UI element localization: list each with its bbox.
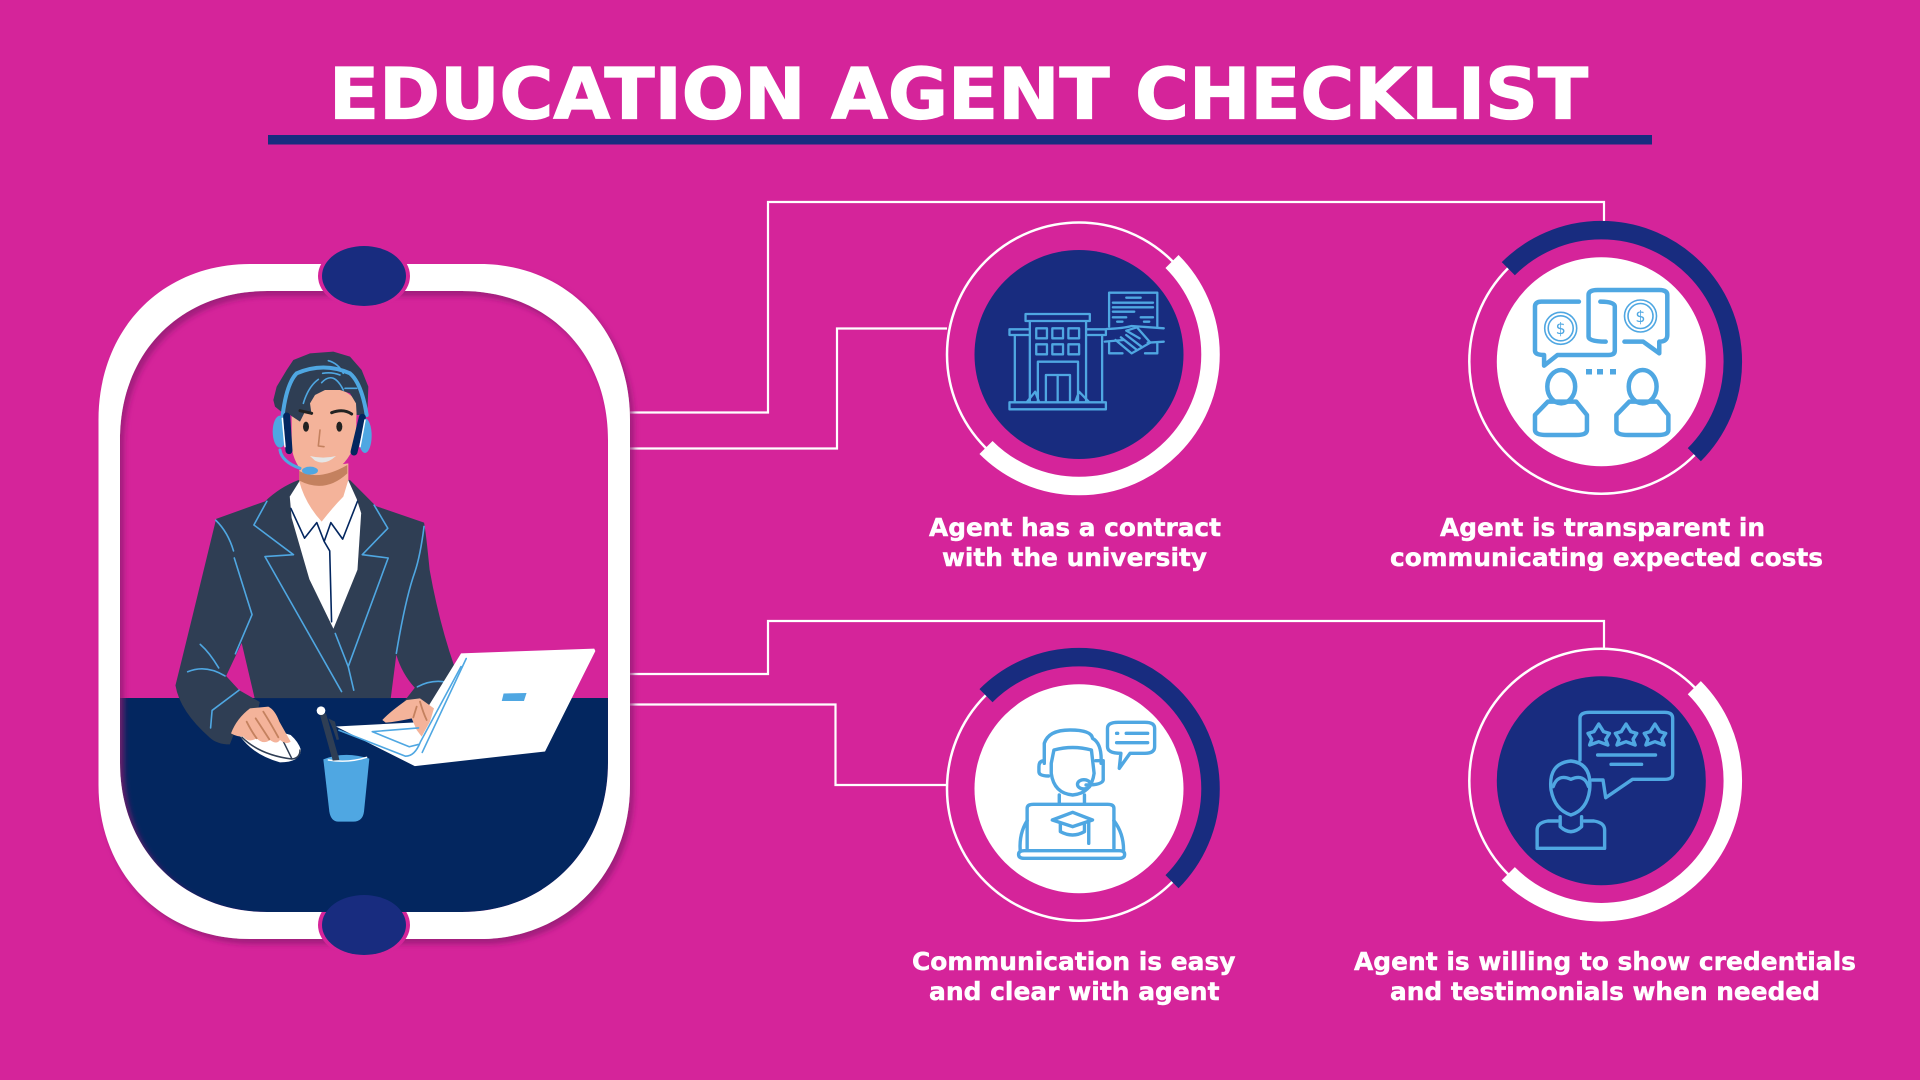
label: and testimonials when needed: [1390, 977, 1820, 1006]
title underline: [268, 135, 1652, 144]
neck: [299, 463, 348, 522]
headset: [273, 367, 372, 475]
jacket seams: [188, 501, 446, 728]
label: Agent is willing to show credentials: [1354, 947, 1856, 976]
right hand: [382, 698, 434, 737]
label: [912, 947, 1236, 1006]
label: communicating expected costs: [1390, 543, 1823, 572]
label: [929, 513, 1221, 572]
icon: money conversation: $: [1556, 319, 1566, 338]
bottom oval: [318, 892, 410, 958]
agent person at laptop: [175, 352, 595, 822]
checklist item 2: transparent costs: [1390, 230, 1823, 572]
title: EDUCATION AGENT CHECKLIST: [329, 54, 1588, 136]
mouse: [240, 732, 301, 762]
icon: money conversation: [1535, 290, 1668, 435]
label: [1390, 513, 1823, 572]
face: [292, 389, 357, 477]
desk: [110, 698, 620, 923]
ring: [1469, 649, 1733, 913]
icon: graduate support agent: [1019, 722, 1155, 858]
checklist item 1: contract: [929, 222, 1221, 572]
shirt: [290, 480, 361, 629]
hair highlights: [303, 361, 357, 403]
head: [273, 352, 372, 522]
label: [1354, 947, 1856, 1006]
hair: [273, 352, 368, 422]
cup: [323, 755, 369, 822]
label: Communication is easy: [912, 947, 1236, 976]
icon: reviews and testimonial: [1537, 712, 1673, 848]
neck shadow: [299, 465, 347, 486]
label: with the university: [942, 543, 1207, 572]
facial features: [300, 411, 352, 463]
ring: [947, 657, 1211, 921]
left hand: [231, 707, 291, 743]
checklist item 3: communication: [912, 657, 1236, 1006]
icon: money conversation: $: [1635, 307, 1646, 326]
ring: [947, 222, 1211, 486]
rounded white frame: [98, 264, 630, 939]
panel: agent illustration frame: [98, 243, 630, 958]
desk items and hands: [231, 706, 369, 822]
checklist item 4: credentials: [1354, 649, 1856, 1006]
icon: building and handshake: [1009, 293, 1164, 409]
ring: [1469, 230, 1733, 494]
top oval: [318, 243, 410, 309]
pen: [317, 706, 339, 761]
label: Agent is transparent in: [1440, 513, 1765, 542]
connector lines: [630, 202, 1604, 785]
label: Agent has a contract: [929, 513, 1221, 542]
laptop: [336, 649, 595, 766]
label: and clear with agent: [929, 977, 1220, 1006]
jacket: [175, 480, 454, 744]
collar lines: [291, 501, 357, 622]
